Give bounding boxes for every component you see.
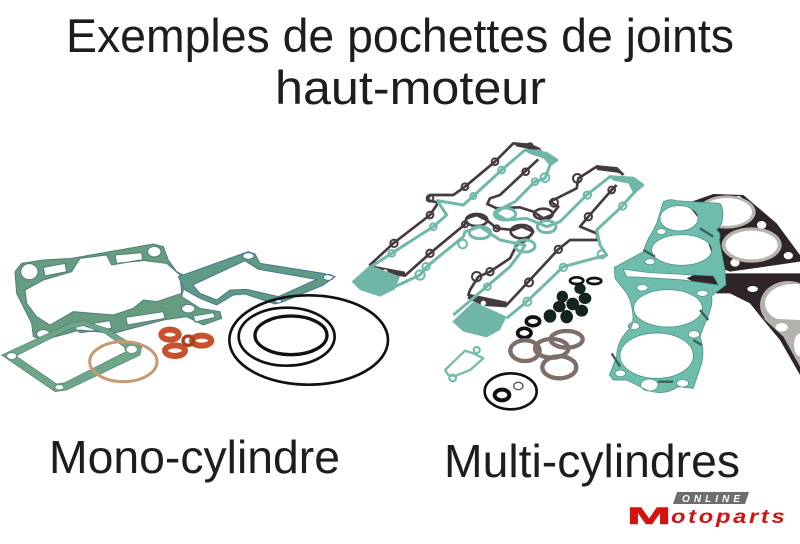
gasket: teal valve cover pair [370, 150, 643, 318]
O-ring set [485, 373, 537, 409]
gasket: dark head gasket top [687, 194, 800, 272]
valve stem seals [544, 283, 591, 323]
O-rings [229, 295, 388, 385]
gasket: teal end plates [352, 149, 643, 337]
gasket: exhaust frame [2, 321, 142, 392]
copper washers [161, 330, 211, 356]
label: mono-cylindre: Mono-cylindre [49, 431, 340, 483]
panel: cylinder head gaskets and small parts [445, 194, 800, 409]
gasket: dark head gasket bottom [687, 273, 800, 375]
gasket: small teal flange [445, 347, 483, 381]
gasket: mono-cylinder head [178, 252, 335, 305]
logo: Online Motoparts: ONLINE [682, 494, 740, 505]
gasket: teal cylinder head [609, 200, 726, 393]
title: Exemples de pochettes de joints [66, 9, 734, 62]
metal valve rings [510, 331, 583, 378]
logo: Online Motoparts [627, 492, 785, 530]
title: haut-moteur [275, 61, 546, 114]
logo: Online Motoparts: M [627, 503, 671, 530]
gasket: dark plates [370, 143, 625, 307]
gasket: mono-cylinder base [15, 244, 222, 340]
panel: mono-cylinder gasket kit [2, 244, 388, 392]
label: multi-cylindres: Multi-cylindres [444, 435, 740, 487]
title [66, 9, 734, 114]
small black O-rings [518, 277, 601, 338]
panel: multi-cylinder gasket kit [352, 143, 643, 337]
copper ring [90, 342, 157, 382]
logo: Online Motoparts: otoparts [671, 506, 785, 527]
gasket: dark valve cover pair [370, 143, 623, 305]
